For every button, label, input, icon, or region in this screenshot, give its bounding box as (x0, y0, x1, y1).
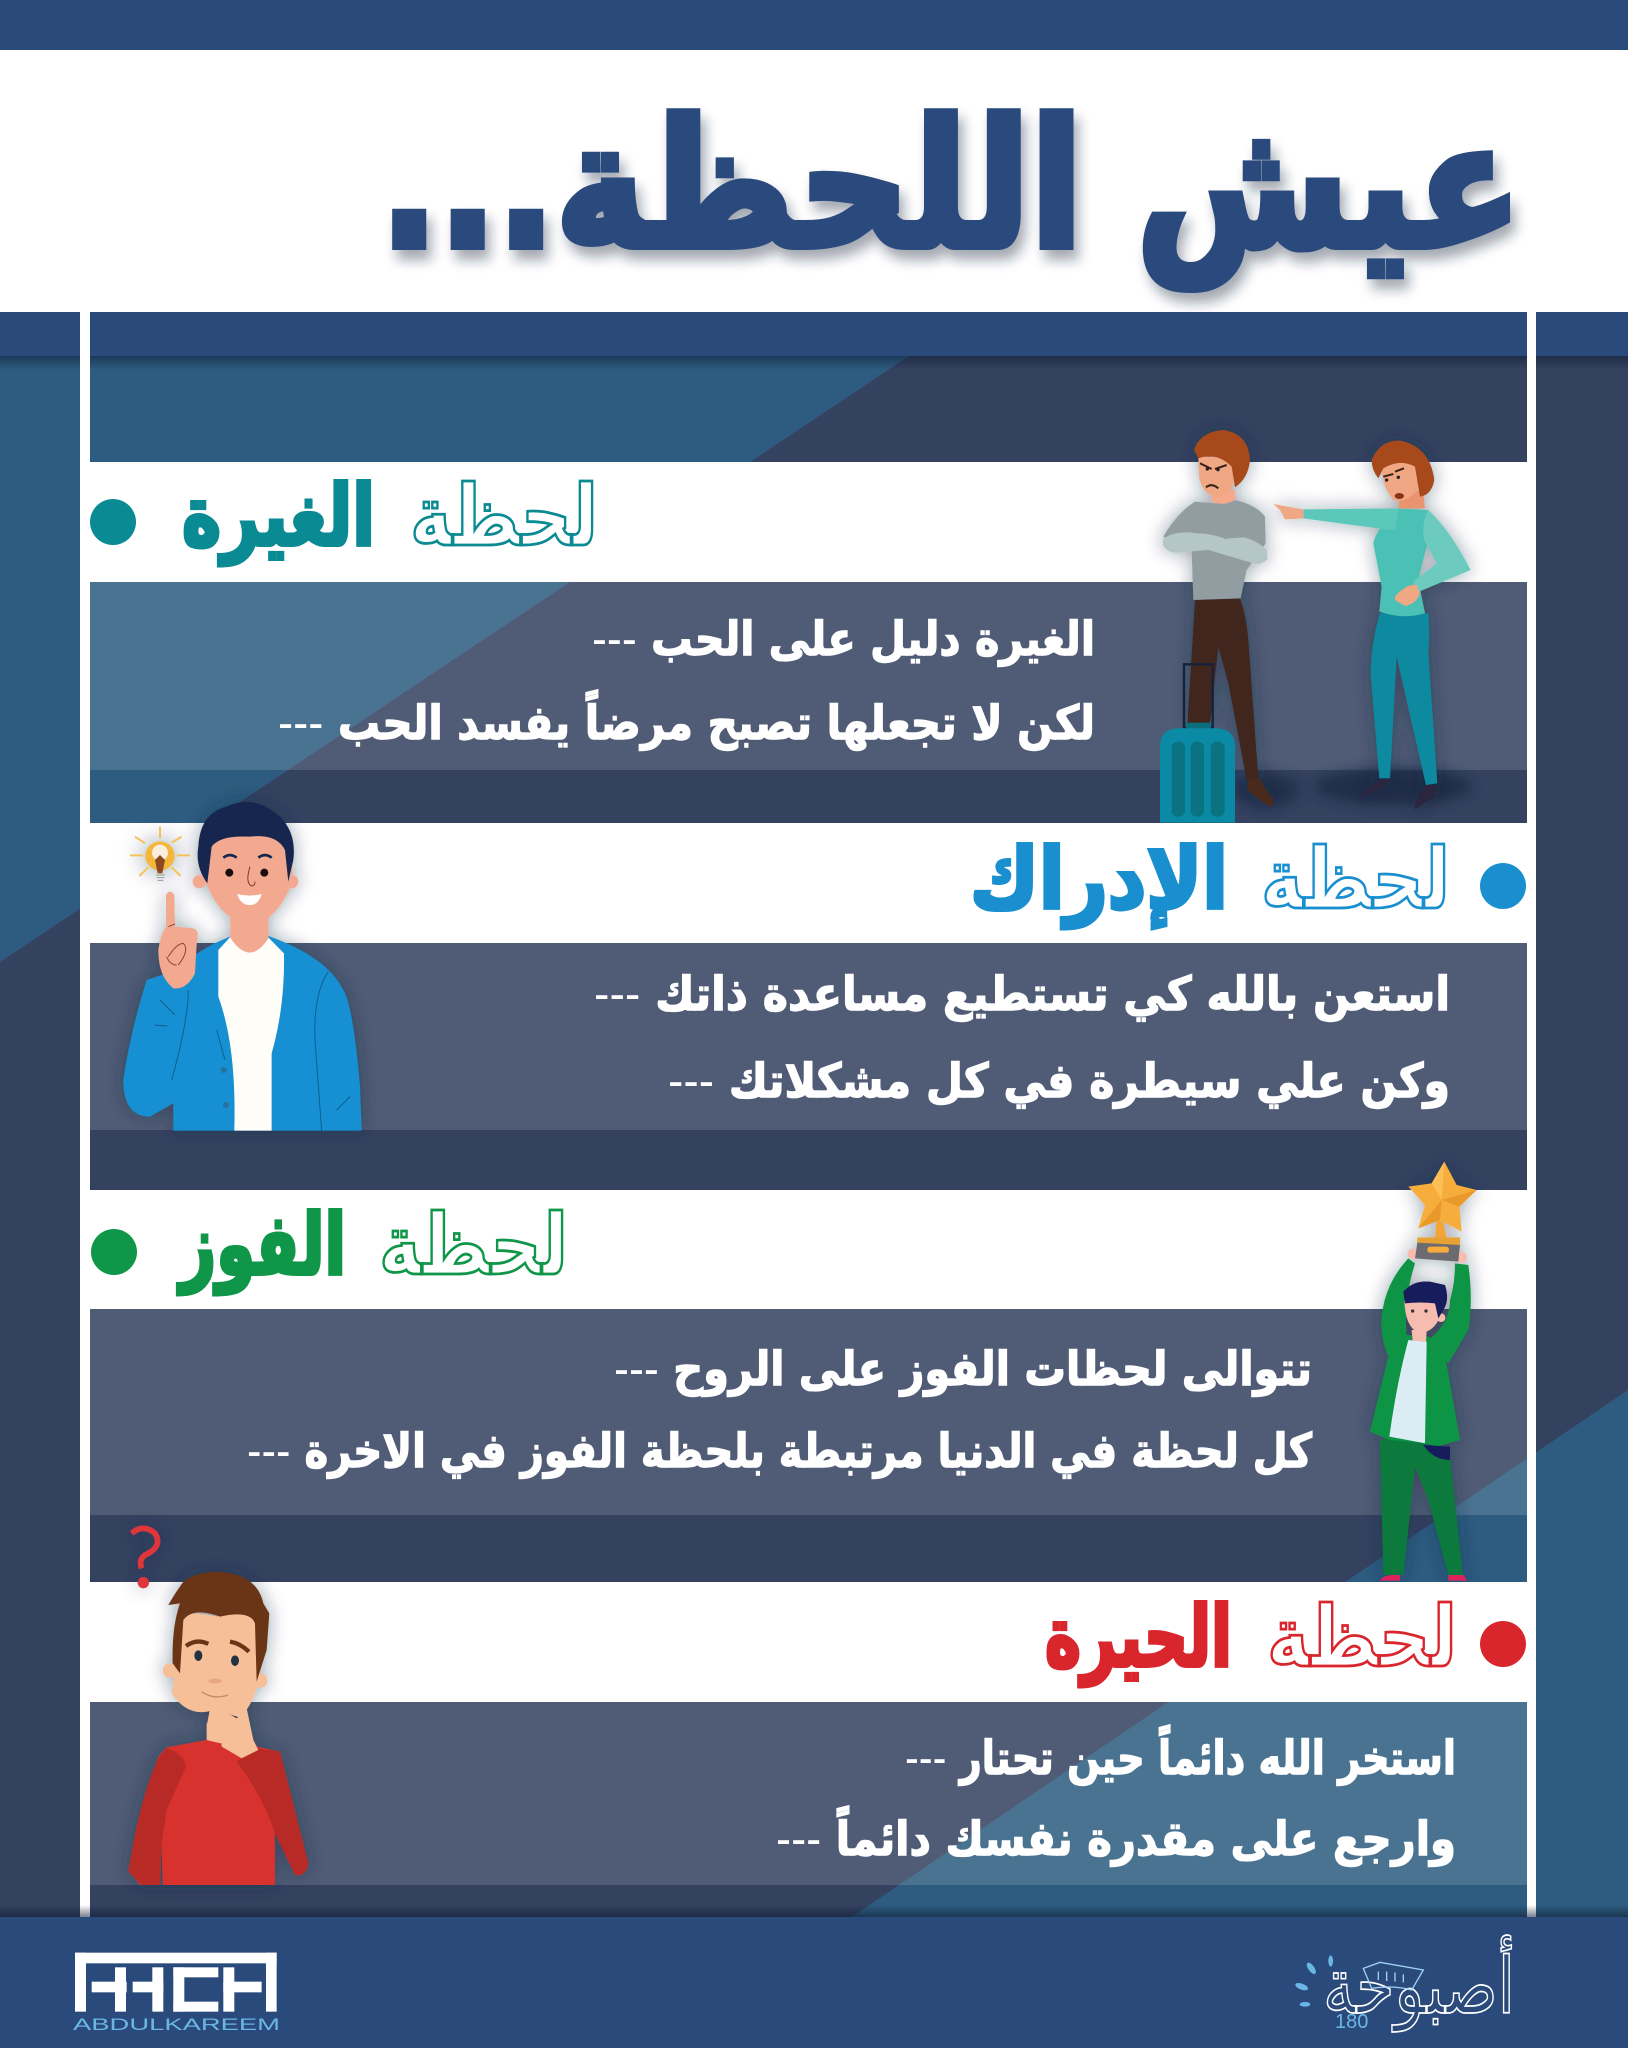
bullet: green dot (91, 1229, 137, 1275)
text block: confusion (776, 1725, 1456, 1867)
logo: Osbouha 180: أصبوحة (1323, 1935, 1515, 2033)
heading: victory moment: لحظة (379, 1196, 568, 1294)
footer (0, 1905, 1628, 2048)
illustration: man with idea and light bulb (123, 802, 362, 1131)
logo: Osbouha 180 (1294, 1935, 1515, 2033)
heading: confusion moment: الحيرة (1045, 1588, 1232, 1687)
text block: jealousy: لكن لا تجعلها تصبح مرضاً يفسد الحب --- (278, 690, 1095, 751)
illustration: man raising star trophy (1370, 1162, 1477, 1581)
illustration: arguing couple with suitcase (1160, 430, 1472, 823)
illustration: thinking man with question mark (128, 1528, 308, 1885)
text block: confusion: استخر الله دائماً حين تحتار --- (905, 1725, 1456, 1786)
heading: jealousy moment: لحظة (410, 467, 598, 565)
panel: confusion (90, 1528, 1527, 1885)
text block: realization (594, 967, 1450, 1109)
heading: realization moment: لحظة (1261, 830, 1450, 928)
heading: realization moment: الإدراك (970, 830, 1228, 929)
heading: jealousy moment: الغيرة (182, 467, 375, 566)
logo: Abdulkareem (73, 1953, 280, 2034)
title panel (0, 50, 1628, 312)
logo: Osbouha 180: 180 (1335, 2011, 1368, 2033)
bullet: red dot (1480, 1621, 1526, 1667)
heading: confusion moment: لحظة (1267, 1588, 1457, 1686)
text block: realization: استعن بالله كي تستطيع مساعدة ذاتك --- (594, 967, 1450, 1022)
text block: jealousy (278, 612, 1095, 751)
top blue bar (0, 0, 1628, 50)
panel: realization (90, 802, 1527, 1131)
text block: realization: وكن علي سيطرة في كل مشكلاتك --- (668, 1054, 1450, 1109)
blue band under title (0, 312, 1628, 356)
heading: victory moment (177, 1196, 568, 1295)
white frame lines (80, 312, 1536, 1917)
heading: jealousy moment (182, 467, 598, 566)
heading: realization moment (970, 830, 1450, 929)
text block: victory (247, 1342, 1313, 1479)
logo: Abdulkareem: ABDULKAREEM (73, 2015, 280, 2034)
heading: confusion moment (1045, 1588, 1457, 1687)
text block: victory: تتوالى لحظات الفوز على الروح --- (614, 1342, 1312, 1397)
text block: jealousy: الغيرة دليل على الحب --- (592, 612, 1095, 667)
bullet: teal dot (90, 499, 136, 545)
panel: victory (90, 1162, 1527, 1581)
heading: victory moment: الفوز (177, 1196, 346, 1295)
bullet: blue dot (1480, 863, 1526, 909)
text block: confusion: وارجع على مقدرة نفسك دائماً --- (776, 1806, 1456, 1867)
panel: jealousy (90, 430, 1527, 823)
text block: victory: كل لحظة في الدنيا مرتبطة بلحظة الفوز في الاخرة --- (247, 1424, 1313, 1479)
